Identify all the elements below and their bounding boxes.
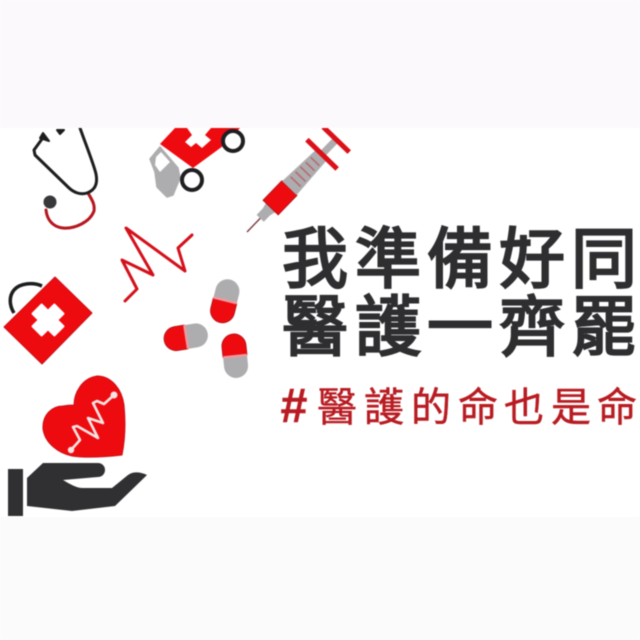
hashtag: 也 [504, 386, 544, 430]
hashtag: 護 [364, 386, 404, 430]
hashtag: # [281, 380, 307, 433]
bottom band [0, 517, 640, 640]
pill: lower [221, 333, 249, 379]
icon: heart with pulse [43, 376, 125, 457]
icon: pills [162, 277, 249, 379]
headline line 2: 罷 [571, 290, 637, 364]
headline line 1: 備 [427, 222, 493, 296]
headline line 2: 醫 [282, 290, 348, 364]
icon: syringe [232, 123, 353, 247]
icon: open hand [8, 463, 147, 516]
pill: upper [208, 277, 242, 325]
top band [0, 0, 640, 128]
hashtag: 醫 [317, 386, 357, 430]
hashtag: 命 [458, 386, 498, 430]
icon: stethoscope [34, 128, 97, 228]
headline line 1: 好 [499, 222, 565, 296]
hashtag: 命 [597, 386, 637, 430]
headline line 1: 準 [355, 222, 421, 296]
hashtag: 的 [411, 386, 451, 430]
hashtag: 是 [551, 386, 591, 430]
pill: left [162, 322, 210, 352]
icon: first aid kit [4, 277, 92, 364]
headline line 2: 齊 [499, 290, 565, 364]
icon: heartbeat line [122, 228, 192, 301]
headline line 1: 同 [571, 222, 637, 296]
headline [282, 222, 637, 364]
headline line 1: 我 [282, 222, 348, 296]
headline line 2: 一 [427, 290, 493, 364]
headline line 2: 護 [355, 290, 421, 364]
icon: ambulance [150, 128, 243, 197]
